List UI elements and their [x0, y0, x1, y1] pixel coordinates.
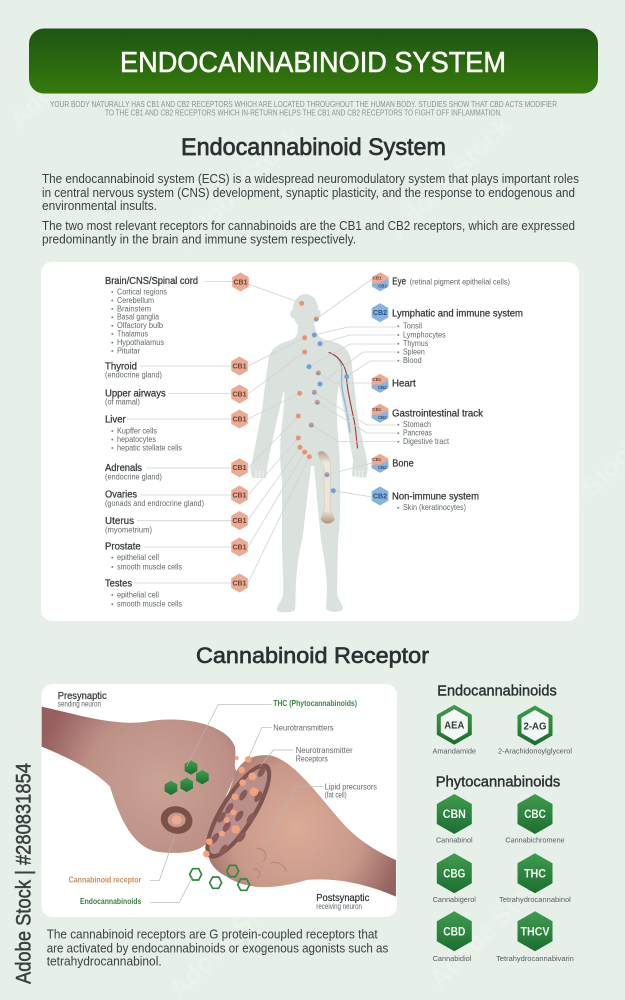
icon: CBC: CBC: [524, 807, 546, 821]
icon: 2-AG: 2-AG: [524, 720, 546, 732]
synapse labels: Neurotransmitters: [273, 723, 334, 732]
mixed and CB2 hexagons: CB2: [378, 415, 387, 420]
eye label: (retinal pigment epithelial cells): [410, 278, 510, 286]
brain label: Hypothalamus: [117, 338, 164, 347]
gastrointestinal label: Pancreas: [403, 429, 432, 438]
mixed and CB2 hexagons: [372, 272, 389, 506]
synapse labels: sending neuron: [58, 700, 101, 708]
non-immune label: Skin (keratinocytes): [403, 503, 466, 512]
synapse labels: Cannabinoid receptor: [69, 876, 142, 884]
testes label: [105, 579, 182, 609]
presynaptic neuron: [42, 707, 237, 853]
finger gaps: [256, 470, 362, 479]
intro text: in central nervous system (CNS) development, synaptic plasticity, and the response to endogenous and: [42, 186, 575, 200]
synapse labels: THC (Phytocannabinoids): [273, 699, 357, 708]
panel: body receptor map: [41, 262, 579, 621]
lymphatic label: [392, 308, 523, 365]
watermark: Adobe Stock: [173, 120, 307, 254]
panel: phytocannabinoids: [433, 774, 574, 963]
panel: phytocannabinoids: Phytocannabinoids: [436, 774, 560, 791]
uterus label: Uterus: [105, 516, 134, 527]
CB1 hexagons: CB1: [232, 580, 247, 588]
synapse labels: Lipid precursors: [325, 782, 377, 791]
icon: THCV: THCV: [520, 924, 550, 938]
subtitle: TO THE CB1 AND CB2 RECEPTORS WHICH IN-RETURN HELPS THE CB1 AND CB2 RECEPTORS TO FIGHT OFF INFLAMMATION.: [105, 108, 502, 118]
endocannabinoid hexagons: [190, 865, 250, 890]
panel: phytocannabinoids: Tetrahydrocannabinol: [499, 895, 571, 904]
icon: CBG: [437, 853, 472, 893]
icon: femur bone: [318, 451, 334, 524]
watermark: Adobe: [3, 56, 81, 134]
synaptic membrane: [194, 755, 283, 867]
watermark: Adobe Stock: [423, 860, 557, 994]
heading: cannabinoid receptor: Cannabinoid Receptor: [196, 643, 429, 668]
ovaries label: [105, 490, 204, 508]
icon: THC: [518, 853, 552, 893]
lymphatic label: Lymphatic and immune system: [392, 308, 523, 319]
watermark: Adobe Stock: [383, 110, 517, 244]
prostate label: smooth muscle cells: [117, 562, 182, 571]
prostate label: epithelial cell: [117, 553, 159, 562]
mixed and CB2 hexagons: CB1: [373, 275, 382, 280]
synapse labels: Neurotransmitter: [296, 746, 353, 755]
brain label: Brain/CNS/Spinal cord: [105, 276, 198, 287]
non-immune label: [392, 491, 479, 512]
testes label: epithelial cell: [117, 590, 159, 599]
receptor caption: tetrahydrocannabinol.: [47, 955, 162, 969]
CB1 hexagons: CB1: [232, 492, 247, 500]
mixed and CB2 hexagons: CB2: [378, 465, 387, 470]
CB1 hexagons: CB1: [232, 364, 247, 370]
uterus label: [105, 516, 152, 534]
brain label: Cerebellum: [117, 296, 154, 305]
thyroid label: [105, 362, 162, 380]
gastrointestinal label: [392, 408, 484, 446]
receptor caption: [47, 928, 388, 969]
thyroid label: Thyroid: [105, 362, 137, 372]
panel: endocannabinoids: [432, 683, 572, 756]
icon: CBC: [518, 794, 552, 834]
stock credit: Adobe Stock | #280831854: [12, 763, 36, 984]
CB1 hexagons: CB1: [232, 416, 247, 424]
panel: phytocannabinoids: Cannabichromene: [505, 835, 565, 844]
gastrointestinal label: Stomach: [403, 420, 431, 429]
mixed and CB2 hexagons: CB2: [378, 385, 387, 390]
lymphatic label: Spleen: [403, 348, 425, 357]
lipid precursors: [253, 848, 287, 878]
eye label: Eye: [392, 276, 406, 288]
mixed and CB2 hexagons: CB1: [372, 377, 382, 382]
testes label: smooth muscle cells: [117, 600, 182, 609]
panel: phytocannabinoids: Cannabidiol: [433, 954, 472, 963]
testes label: Testes: [105, 579, 132, 590]
adrenals label: (endocrine gland): [105, 472, 162, 481]
mixed and CB2 hexagons: CB2: [378, 283, 387, 288]
intro text: The endocannabinoid system (ECS) is a widespread neuromodulatory system that plays important roles: [42, 172, 579, 186]
CB1 hexagons: CB1: [232, 518, 247, 525]
intro text: environmental insults.: [42, 199, 157, 213]
synapse labels: Receptors: [296, 754, 328, 764]
lymphatic label: Thymus: [403, 339, 428, 348]
icon: CBN: CBN: [443, 807, 466, 821]
liver label: Liver: [105, 414, 126, 426]
prostate label: Prostate: [105, 541, 141, 552]
icon: CBG: CBG: [443, 866, 465, 880]
intro text: [42, 172, 579, 246]
eye label: [392, 276, 510, 288]
panel: phytocannabinoids: Tetrahydrocannabivarin: [496, 954, 574, 963]
synapse labels: Postsynaptic: [316, 893, 369, 904]
mixed and CB2 hexagons: CB2: [373, 310, 387, 317]
brain label: Brainstem: [117, 304, 151, 313]
title banner: ENDOCANNABINOID SYSTEM: [120, 47, 506, 79]
panel: endocannabinoids: Amandamide: [432, 747, 476, 756]
synapse labels: [58, 691, 377, 911]
receptor caption: The cannabinoid receptors are G protein-coupled receptors that: [47, 928, 378, 942]
prostate label: [105, 541, 182, 571]
human body silhouette: [251, 294, 368, 612]
CB1 hexagons: CB1: [232, 465, 247, 472]
panel: endocannabinoids: 2-Arachidonoylglycerol: [498, 747, 572, 756]
upper airways label: [105, 388, 166, 406]
adrenals label: [105, 463, 162, 481]
watermark: Adobe Stock: [43, 410, 177, 544]
panel: phytocannabinoids: Cannabigerol: [433, 895, 476, 904]
CB1 hexagons: CB1: [232, 544, 247, 552]
brain label: Cortical regions: [117, 288, 167, 296]
heart label: Heart: [392, 378, 416, 389]
icon: CBD: [437, 911, 472, 951]
CB1 hexagons: [231, 272, 249, 592]
brain label: [105, 276, 198, 356]
receptors: [209, 765, 267, 857]
lymphatic label: Tonsil: [403, 322, 422, 331]
gastrointestinal label: Gastrointestinal track: [392, 408, 484, 419]
connector lines: [127, 279, 396, 583]
icon: CBD: CBD: [443, 924, 466, 938]
synapse labels: Endocannabinoids: [80, 897, 142, 906]
gastrointestinal label: Digestive tract: [403, 437, 450, 446]
CB1 hexagons: CB1: [232, 392, 247, 398]
upper airways label: Upper airways: [105, 388, 166, 399]
liver label: [105, 414, 182, 452]
mixed and CB2 hexagons: CB1: [372, 407, 382, 412]
panel: phytocannabinoids: Cannabinol: [436, 835, 473, 844]
postsynaptic neuron: [208, 755, 396, 897]
non-immune label: Non-immune system: [392, 491, 479, 502]
uterus label: (myometrium): [105, 525, 152, 534]
brain label: Olfactory bulb: [117, 321, 164, 330]
icon: AEA: AEA: [444, 720, 465, 732]
CB1 hexagons: CB1: [233, 280, 248, 286]
synapse labels: Presynaptic: [58, 691, 107, 702]
brain label: Basal ganglia: [117, 313, 160, 322]
title banner: [29, 28, 598, 94]
mixed and CB2 hexagons: CB2: [373, 494, 387, 500]
receptor dots: [296, 301, 349, 493]
receptor caption: are activated by endocannabinoids or exogenous agonists such as: [47, 941, 388, 955]
synapse labels: receiving neuron: [316, 902, 362, 911]
liver label: hepatocytes: [117, 435, 156, 444]
heading: endocannabinoid system: Endocannabinoid System: [181, 134, 446, 161]
thyroid label: (endocrine gland): [105, 371, 162, 380]
THC hexagons: [165, 760, 209, 795]
brain label: Pituitar: [117, 346, 140, 356]
panel: synapse diagram: [42, 684, 397, 917]
mixed and CB2 hexagons: CB1: [372, 457, 382, 462]
intro text: predominantly in the brain and immune system respectively.: [42, 232, 356, 246]
upper airways label: (of mamal): [105, 397, 140, 406]
icon: THC: THC: [524, 866, 546, 880]
liver label: Kupffer cells: [117, 426, 157, 435]
blood vessels: [329, 352, 358, 448]
ovaries label: (gonads and endrocrine gland): [105, 499, 204, 508]
bone label: Bone: [392, 458, 414, 469]
lymphatic label: Blood: [403, 356, 422, 365]
adrenals label: Adrenals: [105, 463, 142, 474]
lymphatic label: Lymphocytes: [403, 330, 446, 339]
icon: THCV: [518, 911, 552, 951]
ovaries label: Ovaries: [105, 490, 137, 501]
liver label: hepatic stellate cells: [117, 443, 182, 452]
synapse labels: (fat cell): [325, 790, 347, 800]
icon: CBN: [437, 794, 472, 834]
brain label: Thalamus: [117, 330, 148, 339]
intro text: The two most relevant receptors for cannabinoids are the CB1 and CB2 receptors, which are expressed: [42, 219, 575, 233]
leader lines: [150, 704, 323, 902]
cannabinoid receptor: [158, 803, 196, 837]
neurotransmitters: [203, 756, 258, 857]
subtitle: [50, 100, 557, 118]
panel: endocannabinoids: Endocannabinoids: [437, 683, 557, 700]
